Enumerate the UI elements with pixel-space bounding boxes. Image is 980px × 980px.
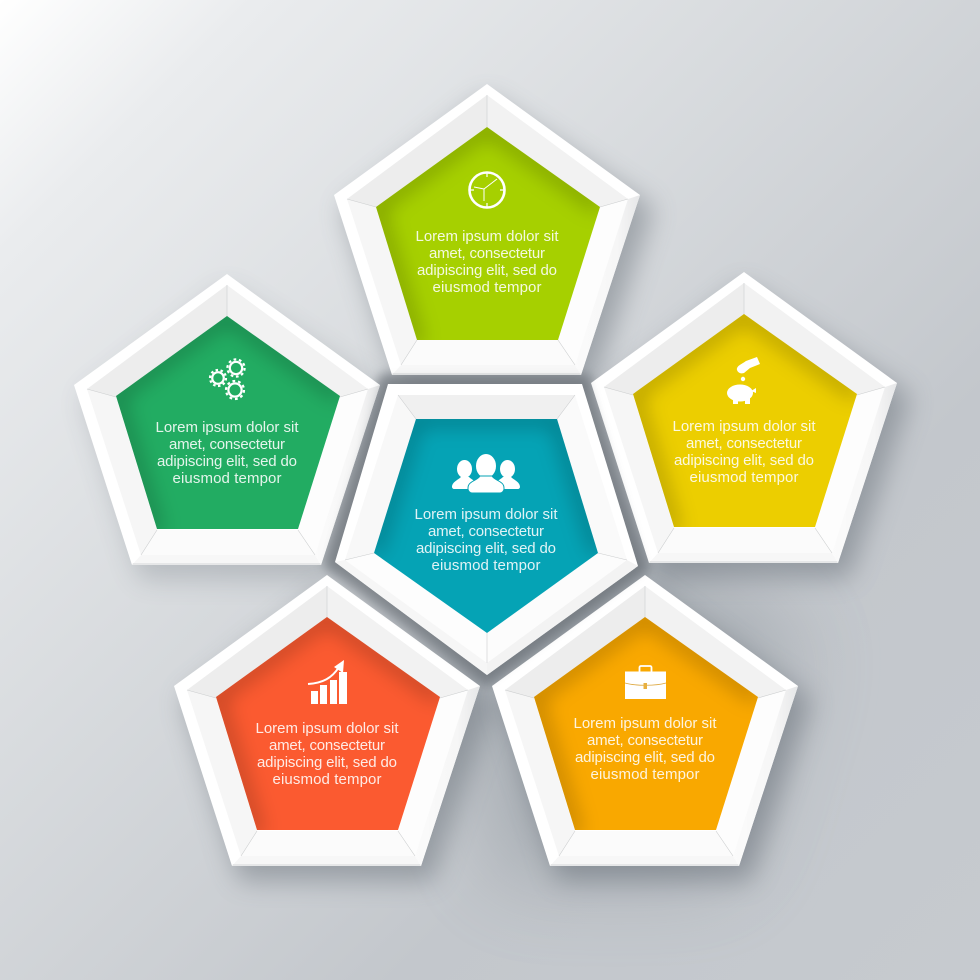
panel: yellow piggy bank xyxy=(591,272,897,563)
text: lime: eiusmod tempor xyxy=(432,279,542,296)
text: red: eiusmod tempor xyxy=(272,771,382,788)
text: yellow xyxy=(672,418,816,486)
panel: green gears xyxy=(74,274,380,565)
panel: orange briefcase xyxy=(492,575,798,866)
text: red: amet, consectetur xyxy=(269,737,385,754)
text: orange: amet, consectetur xyxy=(587,732,703,749)
text: yellow: amet, consectetur xyxy=(686,435,802,452)
shadows behind frames xyxy=(82,96,911,881)
icon: piggy bank xyxy=(727,357,760,404)
text: green: Lorem ipsum dolor sit xyxy=(156,419,299,436)
icon: people xyxy=(452,454,520,493)
text: green: amet, consectetur xyxy=(169,436,285,453)
panel: red chart xyxy=(174,575,480,866)
text: teal: eiusmod tempor xyxy=(432,557,540,574)
text: orange: eiusmod tempor xyxy=(590,766,700,783)
text: teal xyxy=(414,506,558,574)
text: red xyxy=(256,720,399,788)
text: teal: Lorem ipsum dolor sit xyxy=(414,506,558,523)
text: green xyxy=(156,419,299,487)
text: teal: amet, consectetur xyxy=(428,523,544,540)
text: lime: adipiscing elit, sed do xyxy=(417,262,557,279)
text: orange: adipiscing elit, sed do xyxy=(575,749,715,766)
text: lime: Lorem ipsum dolor sit xyxy=(416,228,559,245)
text: orange: Lorem ipsum dolor sit xyxy=(574,715,717,732)
icon: clock xyxy=(470,172,504,208)
panel: lime clock xyxy=(334,84,640,375)
text: red: Lorem ipsum dolor sit xyxy=(256,720,399,737)
text: green: adipiscing elit, sed do xyxy=(157,453,297,470)
text: red: adipiscing elit, sed do xyxy=(257,754,397,771)
icon: chart xyxy=(308,660,347,704)
panel: teal people (center) xyxy=(335,384,638,675)
text: yellow: adipiscing elit, sed do xyxy=(674,452,814,469)
text: yellow: Lorem ipsum dolor sit xyxy=(672,418,816,435)
text: lime: amet, consectetur xyxy=(429,245,545,262)
text: lime xyxy=(416,228,559,296)
icon: briefcase xyxy=(625,666,666,699)
text: orange xyxy=(574,715,717,783)
text: green: eiusmod tempor xyxy=(172,470,282,487)
text: teal: adipiscing elit, sed do xyxy=(416,540,556,557)
text: yellow: eiusmod tempor xyxy=(690,469,798,486)
icon: gears xyxy=(210,359,245,399)
